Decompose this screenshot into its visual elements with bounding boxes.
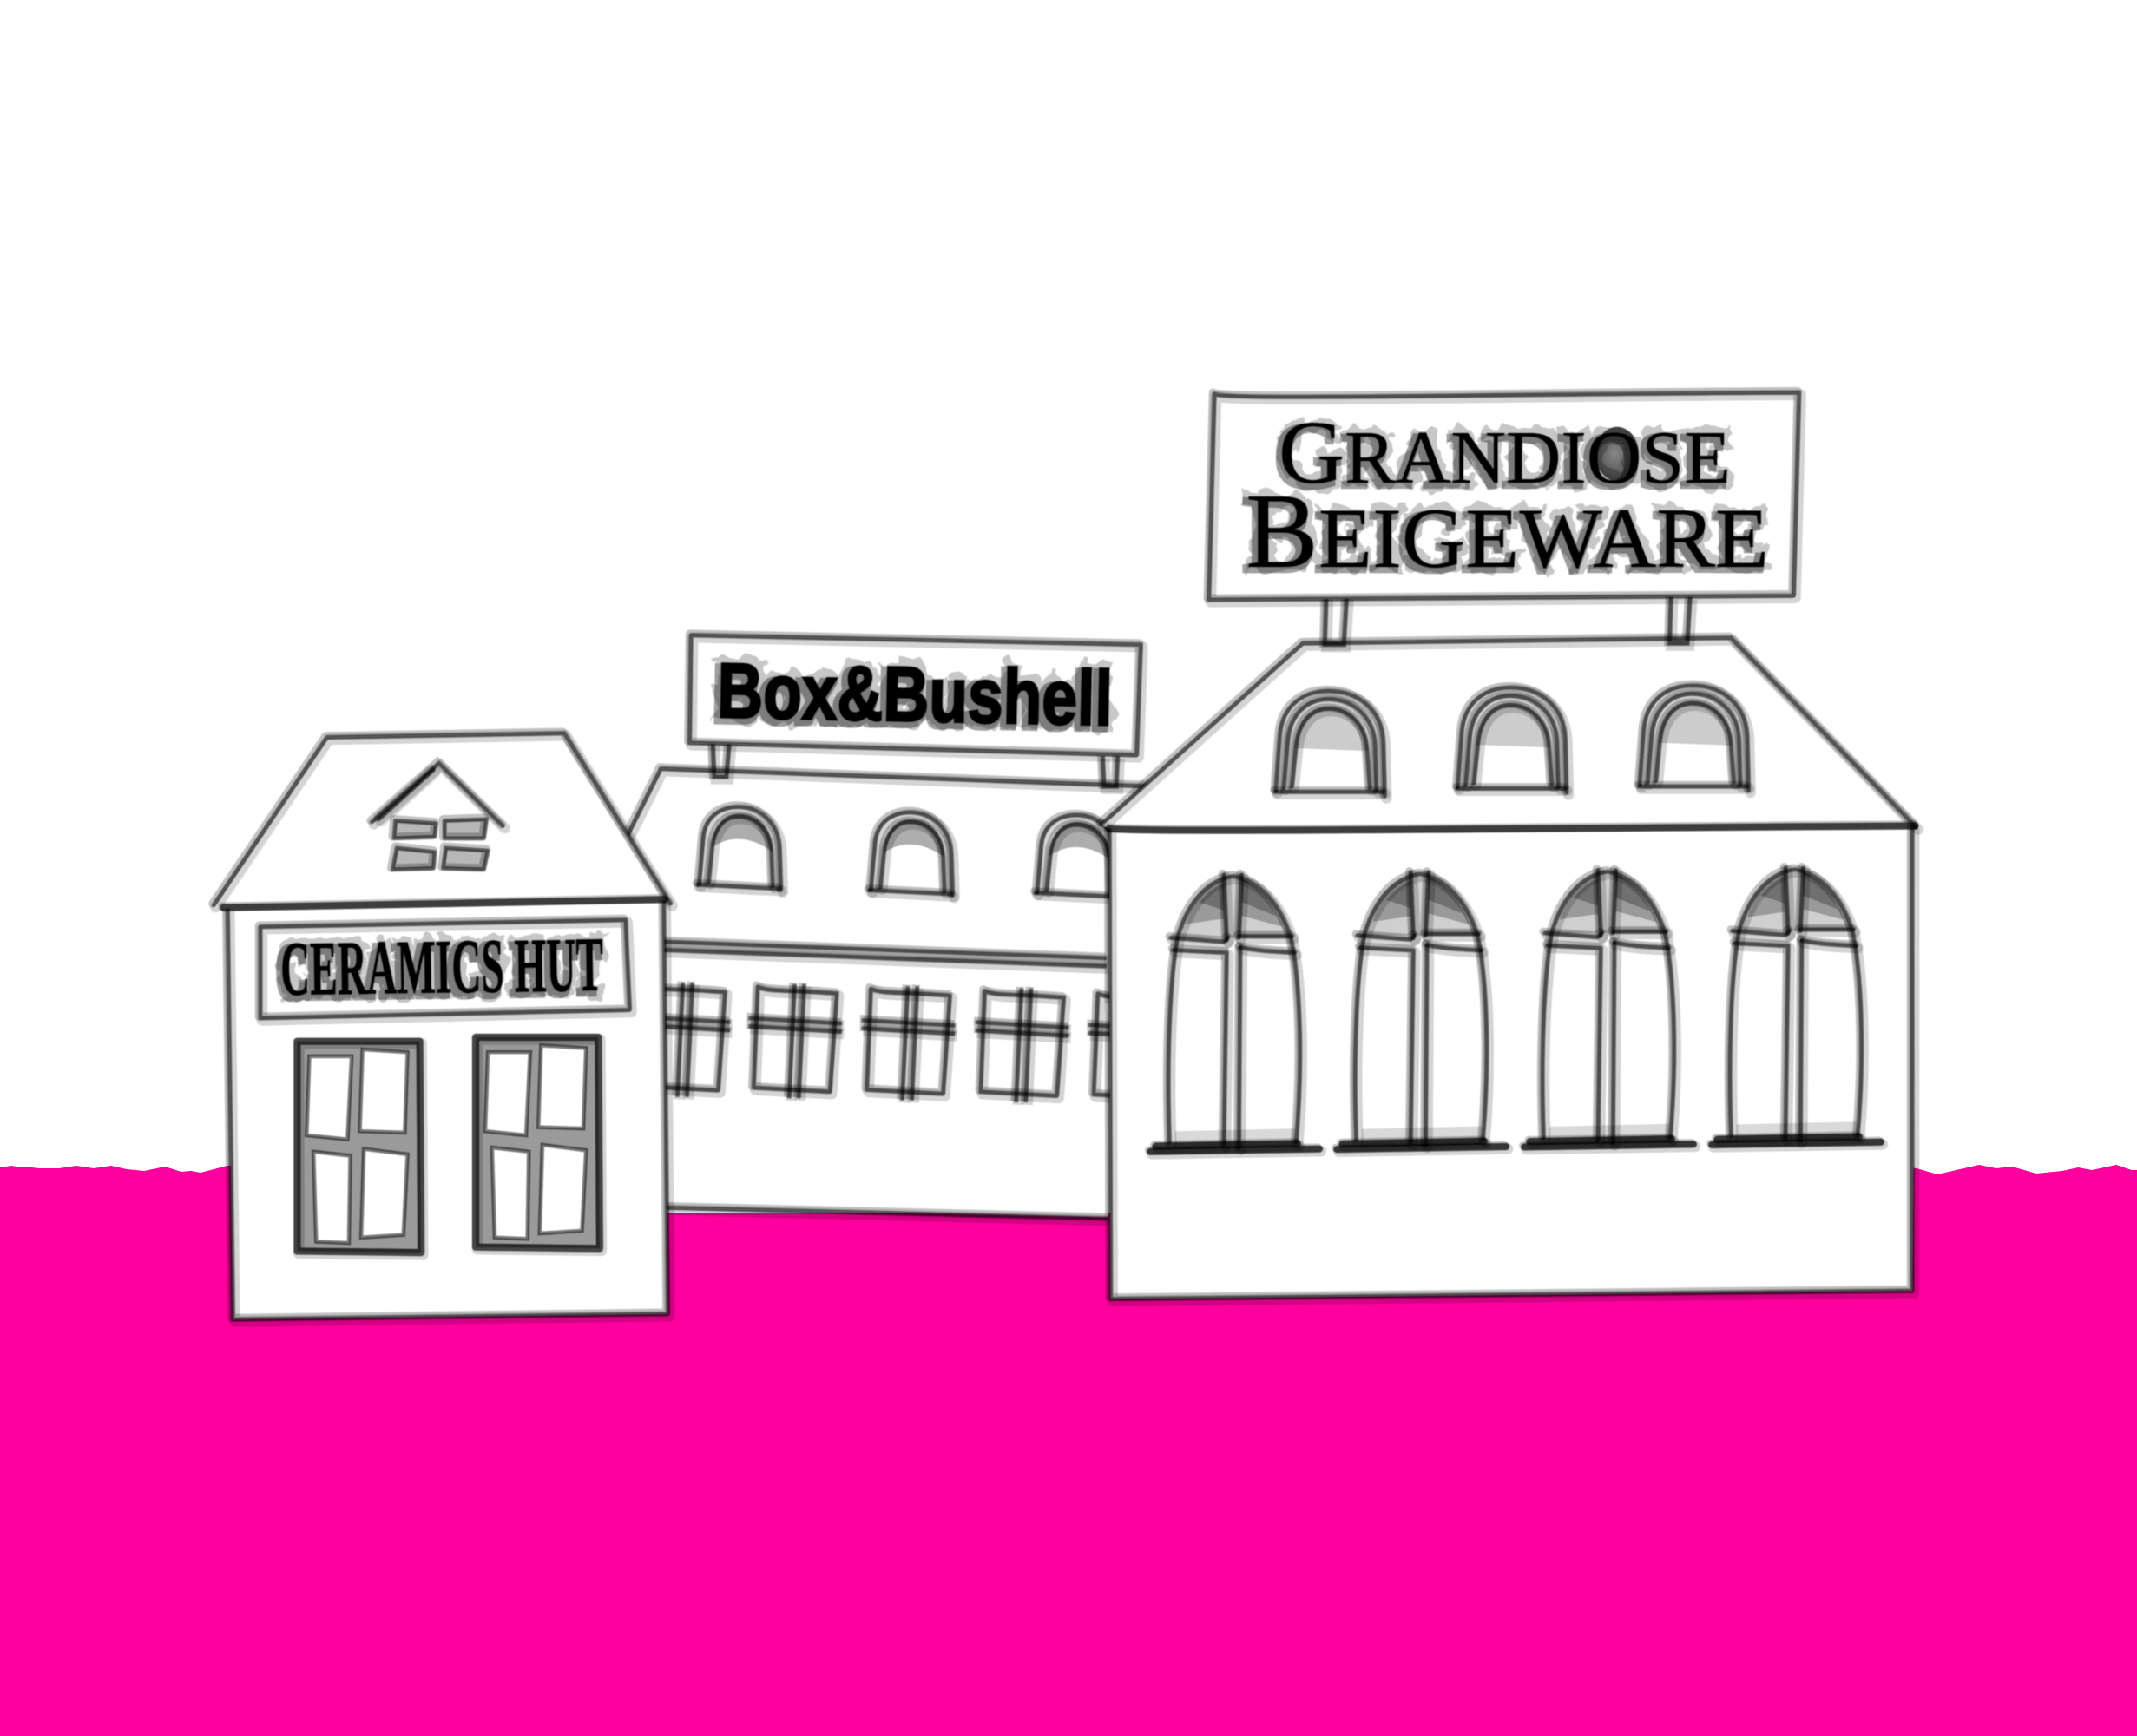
Grandiose Beigeware sign text — [1246, 404, 1769, 590]
Grandiose Beigeware dormer windows — [1274, 684, 1751, 799]
Ceramics Hut ground-floor windows — [297, 1037, 602, 1255]
Grandiose Beigeware posts — [1324, 595, 1692, 647]
Grandiose Beigeware sign board — [1207, 391, 1801, 602]
Box&Bushell posts — [712, 743, 1120, 789]
Grandiose Beigeware sign text: GRANDIOSE — [1279, 404, 1731, 503]
Box&Bushell sign board — [688, 634, 1142, 757]
Grandiose Beigeware walls — [1108, 825, 1914, 1301]
Box&Bushell sign text: Box&Bushell — [717, 647, 1114, 741]
Ceramics Hut roof dormer — [371, 762, 504, 870]
building: Box&Bushell — [627, 634, 1184, 1220]
Ceramics Hut roof — [213, 732, 673, 908]
pink ground — [0, 1165, 2137, 1736]
buildings group — [213, 391, 1918, 1321]
Grandiose Beigeware roof — [1100, 636, 1918, 831]
building: Grandiose Beigeware — [1100, 391, 1918, 1301]
Ceramics Hut walls — [227, 899, 669, 1321]
Box&Bushell upper-floor windows — [635, 982, 1184, 1108]
icon: filled O in Grandiose — [1595, 426, 1639, 481]
building: Ceramics Hut — [213, 732, 673, 1321]
Grandiose Beigeware sign text: BEIGEWARE — [1246, 473, 1769, 590]
Grandiose Beigeware arched windows — [1149, 867, 1883, 1154]
Ceramics Hut sign text: CERAMICS HUT — [279, 922, 604, 1012]
Ceramics Hut sign board — [259, 918, 631, 1020]
Box&Bushell roof and floor lines — [627, 767, 1151, 1220]
Box&Bushell dormer windows — [696, 806, 1121, 900]
